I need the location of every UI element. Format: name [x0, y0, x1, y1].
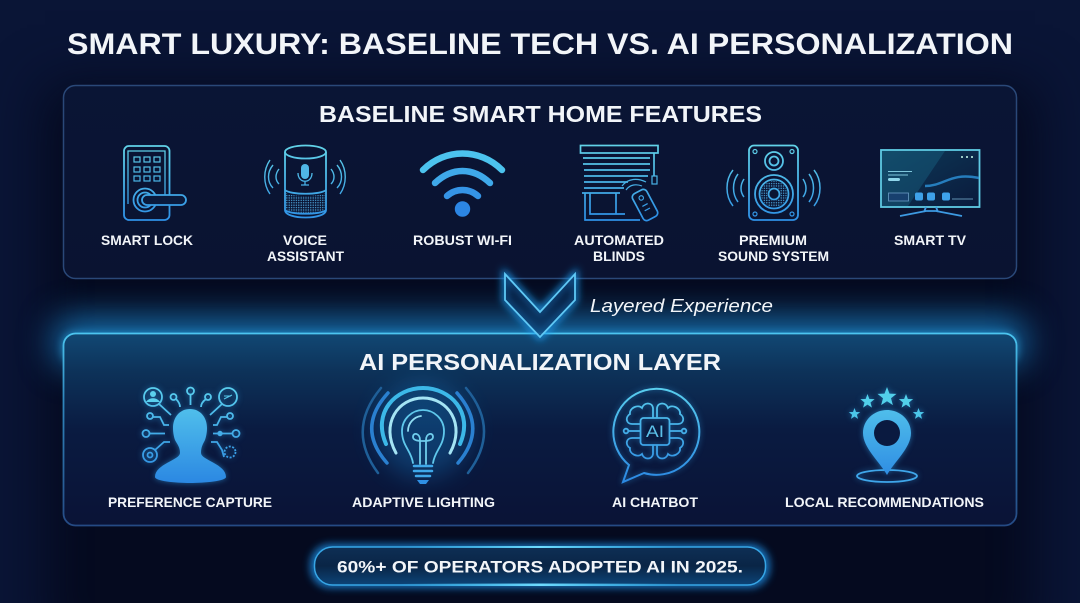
label: smart lock: SMART LOCK [101, 233, 193, 248]
label: robust wi-fi: ROBUST WI-FI [413, 233, 512, 248]
icon: premium sound system [727, 146, 820, 220]
heading: baseline features: BASELINE SMART HOME FEATURES [319, 101, 762, 127]
text: layered experience: Layered Experience [590, 296, 773, 316]
label: voice assistant: ASSISTANT [267, 249, 345, 264]
icon: local recommendations [849, 387, 924, 482]
icon: preference capture [142, 388, 240, 483]
icon: automated blinds [580, 146, 659, 222]
title: SMART LUXURY: BASELINE TECH VS. AI PERSONALIZATION [67, 28, 1013, 61]
heading: ai layer: AI PERSONALIZATION LAYER [359, 349, 721, 375]
label: automated blinds [574, 233, 664, 264]
icon: adaptive lighting [363, 382, 484, 484]
label: automated blinds: BLINDS [593, 249, 645, 264]
stat text: 60%+ OF OPERATORS ADOPTED AI IN 2025. [337, 558, 743, 576]
label: adaptive lighting: ADAPTIVE LIGHTING [352, 495, 495, 510]
label: premium sound system [718, 233, 829, 264]
icon: smart tv [881, 150, 980, 216]
label: preference capture: PREFERENCE CAPTURE [108, 495, 272, 510]
label: voice assistant: VOICE [283, 233, 327, 248]
label: smart tv: SMART TV [894, 233, 966, 248]
panel: baseline smart home features [64, 86, 1016, 278]
label: local recommendations: LOCAL RECOMMENDATIONS [785, 495, 984, 510]
panel: ai personalization layer [64, 334, 1016, 526]
icon: smart lock [124, 146, 186, 220]
label: ai chatbot: AI CHATBOT [612, 495, 699, 510]
label: automated blinds: AUTOMATED [574, 233, 664, 248]
icon: wi-fi [423, 154, 502, 217]
callout: adoption stat pill [310, 544, 770, 588]
icon: ai chatbot [613, 389, 699, 482]
label: premium sound system: PREMIUM [739, 233, 807, 248]
icon: voice assistant [265, 146, 345, 218]
label: voice assistant [267, 233, 345, 264]
text: chip AI: AI [646, 422, 664, 441]
arrow: chevron down [505, 274, 575, 337]
label: premium sound system: SOUND SYSTEM [718, 249, 829, 264]
